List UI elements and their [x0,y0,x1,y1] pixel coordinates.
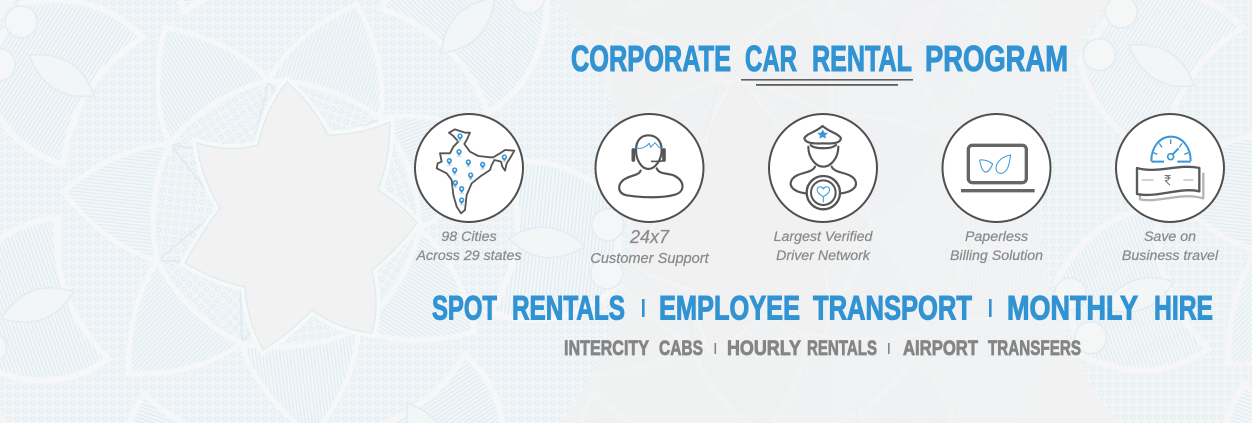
caption: support: 24x7 [629,227,670,247]
services heading: MONTHLY [1007,290,1138,328]
feature: drivers [769,114,877,264]
icon: India map with pins [415,114,523,222]
secondary services: INTERCITY [564,337,649,360]
secondary services [564,337,1081,360]
secondary services: HOURLY [727,337,801,360]
caption: drivers [774,229,874,264]
caption: billing [950,229,1043,264]
services heading: HIRE [1154,290,1213,328]
caption: savings [1122,229,1219,264]
caption: savings: Save on [1144,229,1196,245]
services heading: EMPLOYEE [659,290,800,328]
secondary services: CABS [659,337,703,360]
title: CORPORATE [571,38,731,79]
title: CAR [745,38,797,79]
caption: support [590,227,710,267]
caption: support: Customer Support [590,251,710,267]
caption: drivers: Largest Verified [774,229,874,245]
icon: headset agent [596,114,704,222]
icon: speedometer and rupee note [1116,114,1224,222]
title: PROGRAM [925,38,1068,79]
feature: cities [415,114,523,264]
secondary services: TRANSFERS [988,337,1081,360]
services heading: RENTALS [512,290,625,328]
services heading: TRANSPORT [813,290,972,328]
feature: billing [942,114,1050,264]
secondary services: AIRPORT [903,337,978,360]
caption: billing: Billing Solution [950,248,1043,264]
title: RENTAL [812,38,912,79]
feature: support [590,114,710,267]
caption: drivers: Driver Network [776,248,871,264]
feature: savings [1116,114,1224,264]
caption: cities [416,229,521,264]
caption: cities: 98 Cities [441,229,497,245]
title underline [741,79,913,86]
services heading [432,290,1213,328]
caption: savings: Business travel [1122,248,1219,264]
caption: cities: Across 29 states [416,248,521,264]
secondary services: RENTALS [807,337,877,360]
icon: laptop with leaves [942,114,1050,222]
icon: driver with steering wheel [769,114,877,222]
caption: billing: Paperless [965,229,1028,245]
services heading: SPOT [432,290,497,328]
title [571,38,1068,79]
